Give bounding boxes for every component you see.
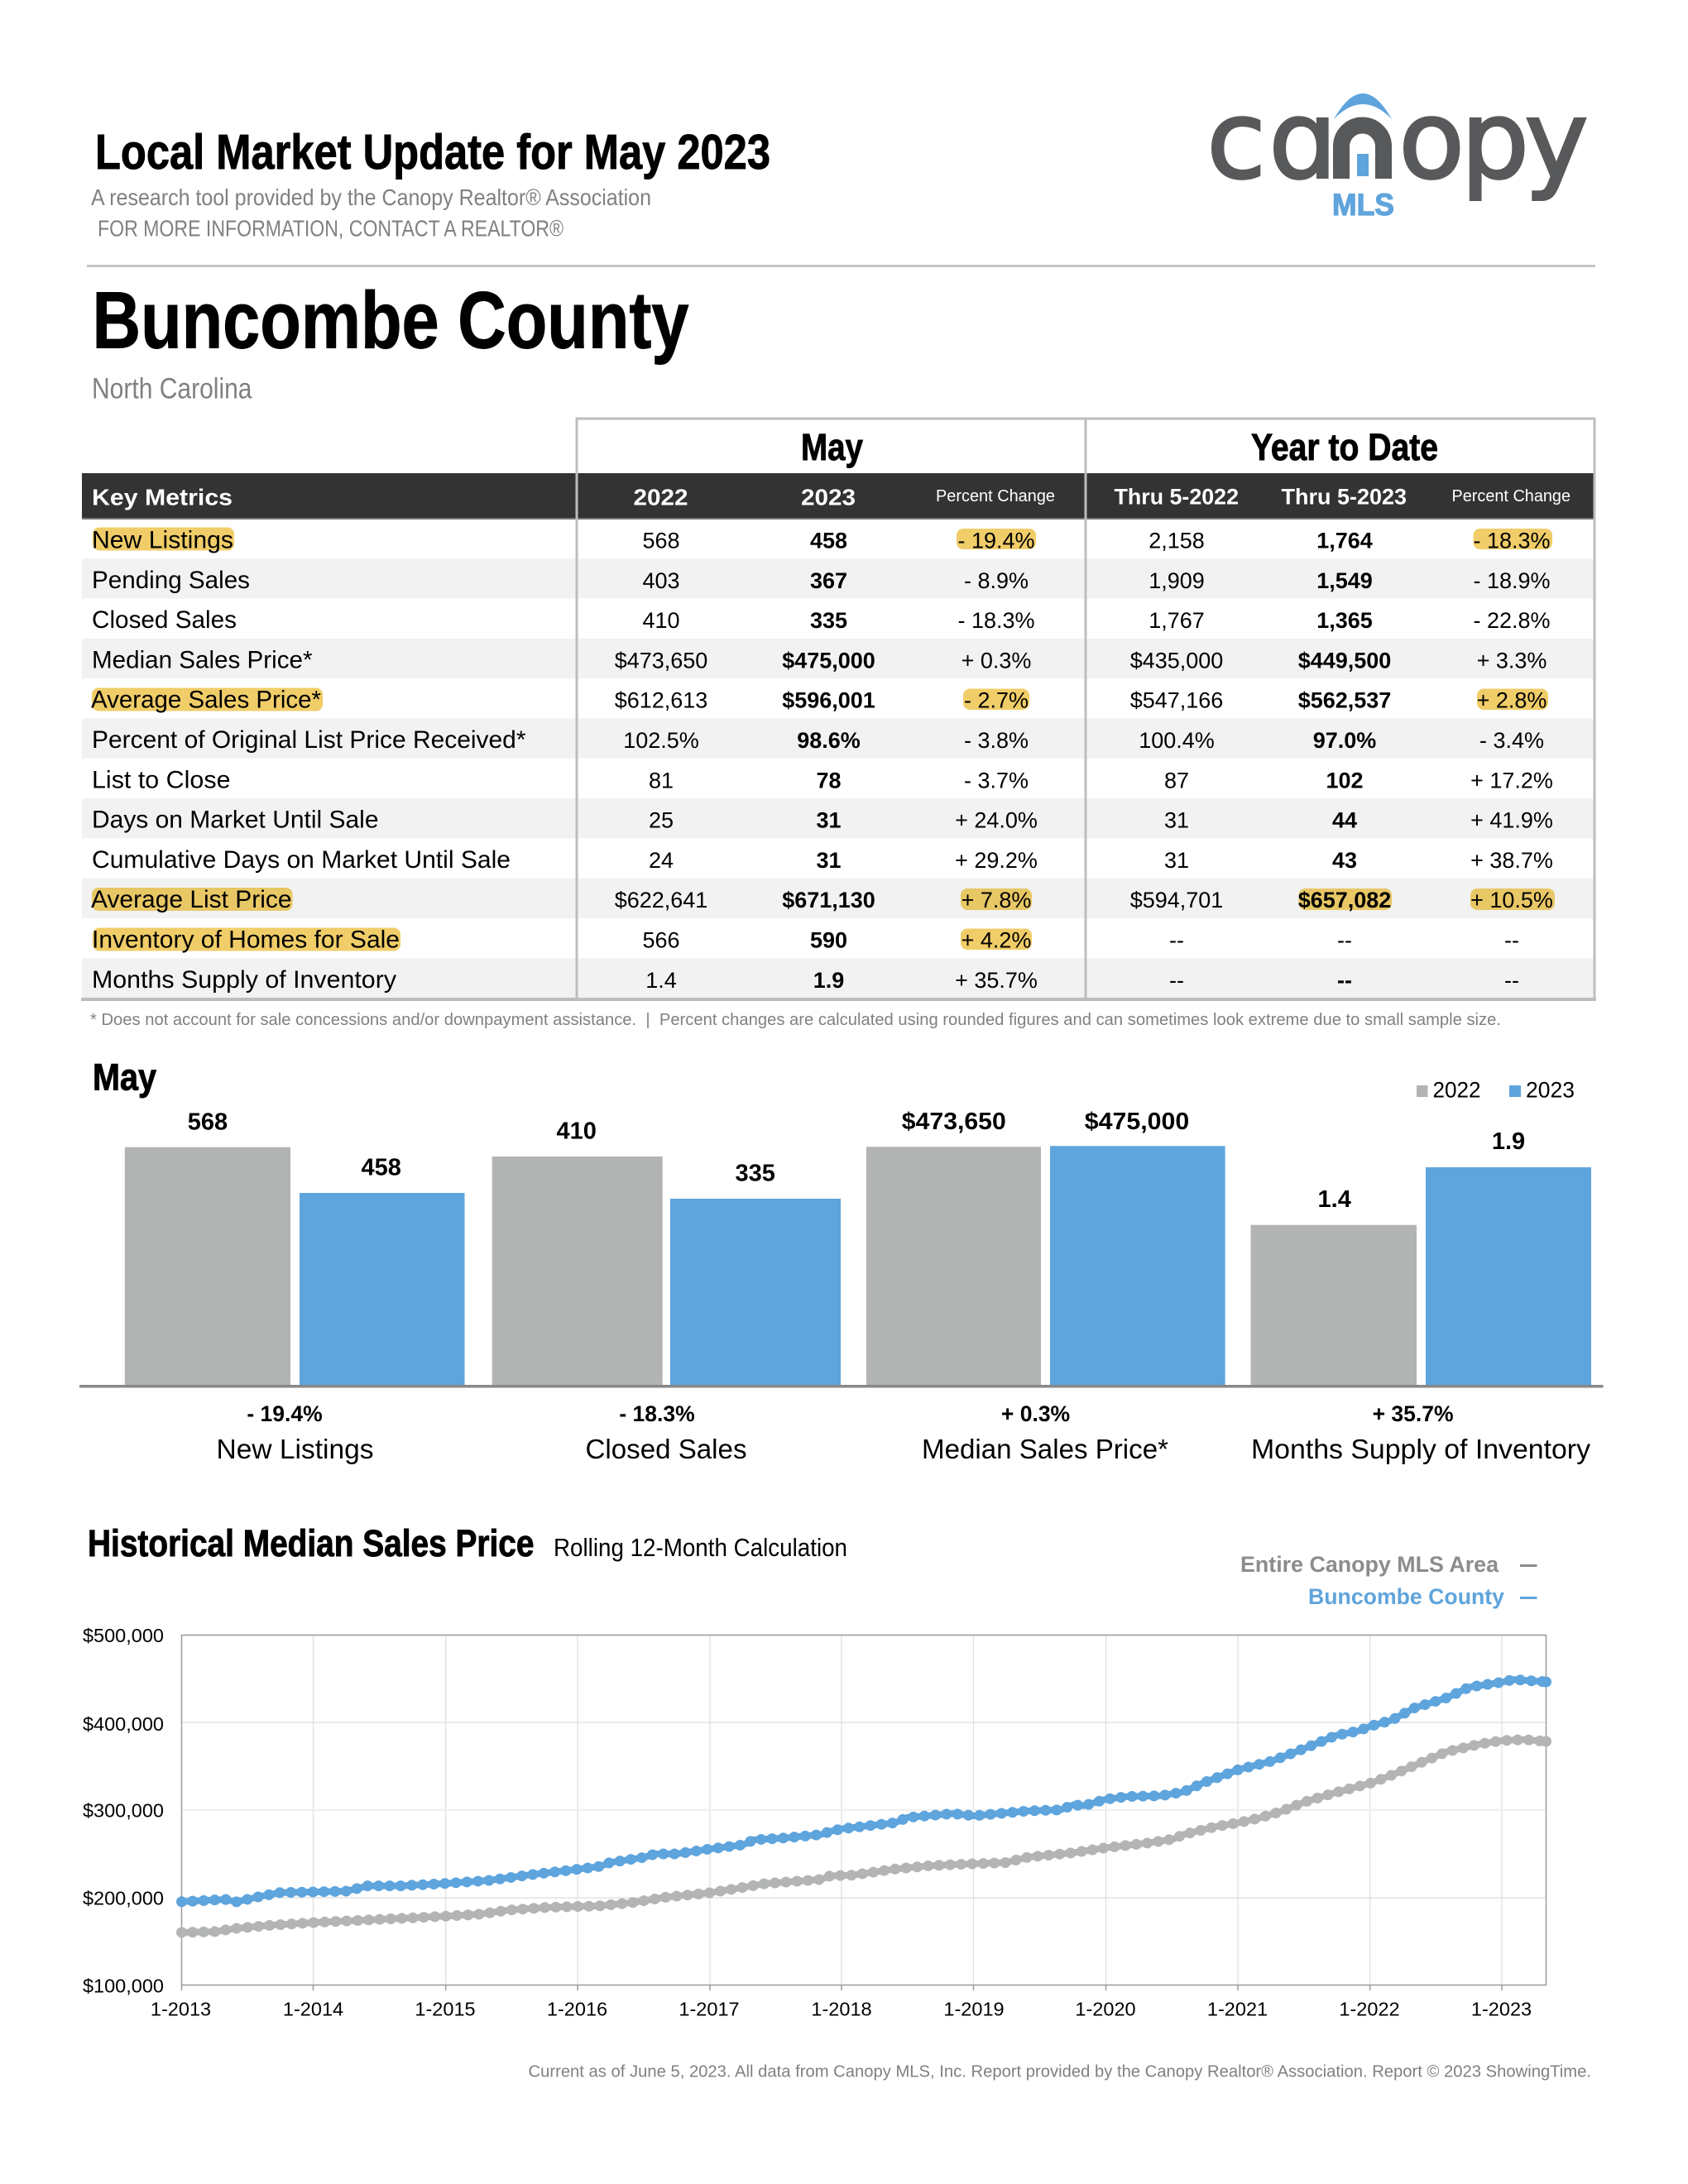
- column group heading: May: May: [801, 426, 863, 468]
- page footer: Current as of June 5, 2023. All data from Canopy MLS, Inc. Report provided by the Canopy Realtor® Association. Report © 2023 ShowingTime.: [528, 2063, 1591, 2081]
- table values: + 2.8%: [1477, 688, 1547, 713]
- table values: $596,001: [782, 688, 875, 713]
- table values: 566: [642, 928, 680, 953]
- table header row: Percent Change: [936, 487, 1055, 505]
- group: New Listings: - 19.4%: [247, 1401, 323, 1426]
- line: Entire Canopy MLS Area: [182, 1736, 1551, 1933]
- table values: 568: [642, 528, 680, 553]
- group: New Listings: [125, 1109, 465, 1464]
- logo: Canopy MLS: p: [1461, 78, 1529, 204]
- table values: --: [1337, 928, 1352, 953]
- group: New Listings: 568: [188, 1109, 228, 1135]
- group: Closed Sales: 335: [736, 1160, 775, 1186]
- highlighted cells: [92, 528, 1555, 951]
- logo: Canopy MLS: MLS: [1332, 188, 1394, 222]
- x axis labels: 1-2019: [943, 1999, 1005, 2020]
- table values: - 18.3%: [1473, 528, 1551, 553]
- row labels: List to Close: [92, 766, 230, 793]
- table values: $547,166: [1130, 688, 1223, 713]
- title: Local Market Update for May 2023: [95, 124, 770, 180]
- table values: 31: [1164, 808, 1189, 833]
- table values: 87: [1164, 768, 1189, 793]
- table values: $594,701: [1130, 888, 1223, 912]
- table values: --: [1169, 928, 1184, 953]
- logo: Canopy MLS: ɑ: [1268, 78, 1337, 204]
- table values: 367: [810, 568, 847, 593]
- table values: $475,000: [782, 648, 875, 673]
- table values: + 10.5%: [1470, 888, 1553, 912]
- table values: - 18.3%: [957, 608, 1035, 633]
- table header row: Thru 5-2022: [1114, 485, 1239, 510]
- chart subheading: Rolling 12-Month Calculation: [554, 1533, 847, 1562]
- table values: $622,641: [615, 888, 707, 912]
- y axis labels: $100,000: [83, 1976, 164, 1997]
- line chart section: historical median sales price: [83, 1522, 1551, 2020]
- table header row: Thru 5-2023: [1281, 485, 1407, 510]
- table values: - 3.7%: [964, 768, 1029, 793]
- legend: Entire Canopy MLS Area: Entire Canopy MLS Area: [1240, 1552, 1499, 1577]
- table values: 97.0%: [1313, 728, 1376, 753]
- x axis labels: 1-2020: [1075, 1999, 1136, 2020]
- table values: 43: [1332, 848, 1357, 873]
- table values: + 4.2%: [961, 928, 1031, 953]
- table values: $671,130: [782, 888, 875, 912]
- table values: 44: [1332, 808, 1357, 833]
- group: Closed Sales: - 18.3%: [619, 1401, 695, 1426]
- legend: 2023: [1526, 1077, 1575, 1102]
- group: Months Supply of Inventory: + 35.7%: [1373, 1401, 1454, 1426]
- legend: 2022: [1433, 1077, 1481, 1102]
- table values: 31: [816, 848, 842, 873]
- table values: --: [1504, 928, 1519, 953]
- group: Months Supply of Inventory: Months Supply of Inventory: [1251, 1434, 1591, 1464]
- table values: 1.9: [813, 968, 844, 993]
- logo: Canopy MLS: [1206, 78, 1588, 222]
- chart heading: Historical Median Sales Price: [88, 1522, 535, 1564]
- x axis labels: 1-2016: [547, 1999, 607, 2020]
- group: Median Sales Price: Median Sales Price*: [922, 1434, 1168, 1464]
- table values: - 22.8%: [1473, 608, 1551, 633]
- table values: [615, 528, 1553, 993]
- y axis labels: $300,000: [83, 1800, 164, 1822]
- table values: 24: [649, 848, 674, 873]
- table values: --: [1169, 968, 1184, 993]
- logo: Canopy MLS: y: [1524, 78, 1588, 204]
- table values: $435,000: [1130, 648, 1223, 673]
- table values: + 35.7%: [955, 968, 1038, 993]
- table values: + 3.3%: [1477, 648, 1547, 673]
- x axis labels: 1-2022: [1339, 1999, 1400, 2020]
- group: New Listings: 458: [362, 1155, 401, 1181]
- table values: 31: [816, 808, 842, 833]
- table values: 1,365: [1316, 608, 1373, 633]
- table values: 458: [810, 528, 847, 553]
- plot grid and axes: [182, 1635, 1546, 1990]
- table values: 102.5%: [623, 728, 699, 753]
- table values: 410: [642, 608, 680, 633]
- legend: Buncombe County: Buncombe County: [1308, 1584, 1504, 1609]
- table values: + 24.0%: [955, 808, 1038, 833]
- table values: 1,549: [1316, 568, 1373, 593]
- x axis labels: 1-2015: [415, 1999, 476, 2020]
- line: Buncombe County: [182, 1676, 1551, 1902]
- group: Months Supply of Inventory: 1.4: [1318, 1186, 1351, 1213]
- table header row: Percent Change: [1451, 487, 1571, 505]
- legend: [1417, 1077, 1575, 1102]
- table values: 1,767: [1149, 608, 1205, 633]
- y axis labels: $400,000: [83, 1713, 164, 1735]
- table header row: 2023: [801, 485, 856, 510]
- x axis labels: [151, 1999, 1532, 2020]
- row labels: Cumulative Days on Market Until Sale: [92, 846, 511, 874]
- group: Closed Sales: Closed Sales: [586, 1434, 746, 1464]
- table values: + 38.7%: [1470, 848, 1553, 873]
- table header row: 2022: [634, 485, 688, 510]
- table values: - 8.9%: [964, 568, 1029, 593]
- logo: Canopy MLS: o: [1398, 78, 1465, 204]
- group: Months Supply of Inventory: 1.9: [1492, 1128, 1525, 1155]
- x axis labels: 1-2014: [283, 1999, 343, 2020]
- table values: $612,613: [615, 688, 707, 713]
- row labels: Closed Sales: [92, 606, 237, 634]
- table values: + 7.8%: [961, 888, 1031, 912]
- row labels: [91, 526, 526, 994]
- y axis labels: [83, 1625, 164, 1997]
- key metrics table: [81, 419, 1596, 1001]
- table values: 1,764: [1316, 528, 1373, 553]
- table values: - 19.4%: [957, 528, 1035, 553]
- table values: 25: [649, 808, 674, 833]
- group: Median Sales Price: $473,650: [902, 1109, 1006, 1135]
- table values: 590: [810, 928, 847, 953]
- column group heading: Year to Date: Year to Date: [1251, 426, 1438, 468]
- table values: - 3.4%: [1479, 728, 1544, 753]
- table values: 31: [1164, 848, 1189, 873]
- group: Median Sales Price: + 0.3%: [1001, 1401, 1070, 1426]
- table values: + 0.3%: [961, 648, 1031, 673]
- state name: North Carolina: [92, 372, 252, 405]
- table values: - 3.8%: [964, 728, 1029, 753]
- chart heading: May: [93, 1056, 156, 1099]
- table values: --: [1337, 968, 1352, 993]
- group: Months Supply of Inventory: [1251, 1128, 1591, 1464]
- table values: 81: [649, 768, 674, 793]
- table values: 2,158: [1149, 528, 1205, 553]
- row labels: Median Sales Price*: [92, 646, 313, 673]
- table values: + 41.9%: [1470, 808, 1553, 833]
- bar chart: May: [79, 1056, 1604, 1464]
- table values: 335: [810, 608, 847, 633]
- table footnote: * Does not account for sale concessions and/or downpayment assistance. | Percent changes are calculated using rounded figures and can sometimes look extreme due to small sample size.: [90, 1011, 1501, 1029]
- group: Closed Sales: 410: [557, 1118, 597, 1145]
- row labels: Average Sales Price*: [91, 687, 321, 714]
- table values: $449,500: [1298, 648, 1391, 673]
- table values: 1.4: [645, 968, 677, 993]
- subtitle: research tool: A research tool provided by the Canopy Realtor® Association: [91, 184, 651, 210]
- table values: 78: [816, 768, 842, 793]
- group: Median Sales Price: $475,000: [1085, 1109, 1189, 1135]
- table header row: Key Metrics: [92, 485, 233, 510]
- group: Closed Sales: [492, 1118, 841, 1464]
- table values: $473,650: [615, 648, 707, 673]
- group: Median Sales Price: [866, 1109, 1225, 1464]
- table values: $657,082: [1298, 888, 1391, 912]
- table values: $562,537: [1298, 688, 1391, 713]
- x axis labels: 1-2023: [1471, 1999, 1532, 2020]
- row labels: Average List Price: [91, 886, 291, 913]
- table values: + 29.2%: [955, 848, 1038, 873]
- row labels: Months Supply of Inventory: [92, 966, 396, 994]
- table values: 1,909: [1149, 568, 1205, 593]
- table values: + 17.2%: [1470, 768, 1553, 793]
- row labels: Percent of Original List Price Received*: [92, 726, 526, 754]
- county name: Buncombe County: [93, 275, 689, 366]
- row labels: Pending Sales: [92, 567, 250, 594]
- group: New Listings: New Listings: [217, 1434, 374, 1464]
- row labels: New Listings: [92, 526, 233, 554]
- row labels: Inventory of Homes for Sale: [92, 927, 400, 953]
- y axis labels: $200,000: [83, 1888, 164, 1909]
- x axis labels: 1-2018: [811, 1999, 872, 2020]
- county heading: [92, 275, 689, 405]
- y axis labels: $500,000: [83, 1625, 164, 1646]
- x axis labels: 1-2013: [151, 1999, 211, 2020]
- subtitle: contact: FOR MORE INFORMATION, CONTACT A REALTOR®: [98, 215, 563, 242]
- x axis labels: 1-2017: [679, 1999, 740, 2020]
- table values: 100.4%: [1139, 728, 1215, 753]
- table values: 102: [1326, 768, 1364, 793]
- x axis labels: 1-2021: [1207, 1999, 1268, 2020]
- table values: - 2.7%: [964, 688, 1029, 713]
- page header: [91, 124, 770, 242]
- logo: Canopy MLS: c: [1206, 78, 1266, 204]
- table values: 403: [642, 568, 680, 593]
- table header row: [82, 473, 1594, 520]
- table values: --: [1504, 968, 1519, 993]
- table values: - 18.9%: [1473, 568, 1551, 593]
- table values: 98.6%: [797, 728, 861, 753]
- row labels: Days on Market Until Sale: [92, 807, 379, 834]
